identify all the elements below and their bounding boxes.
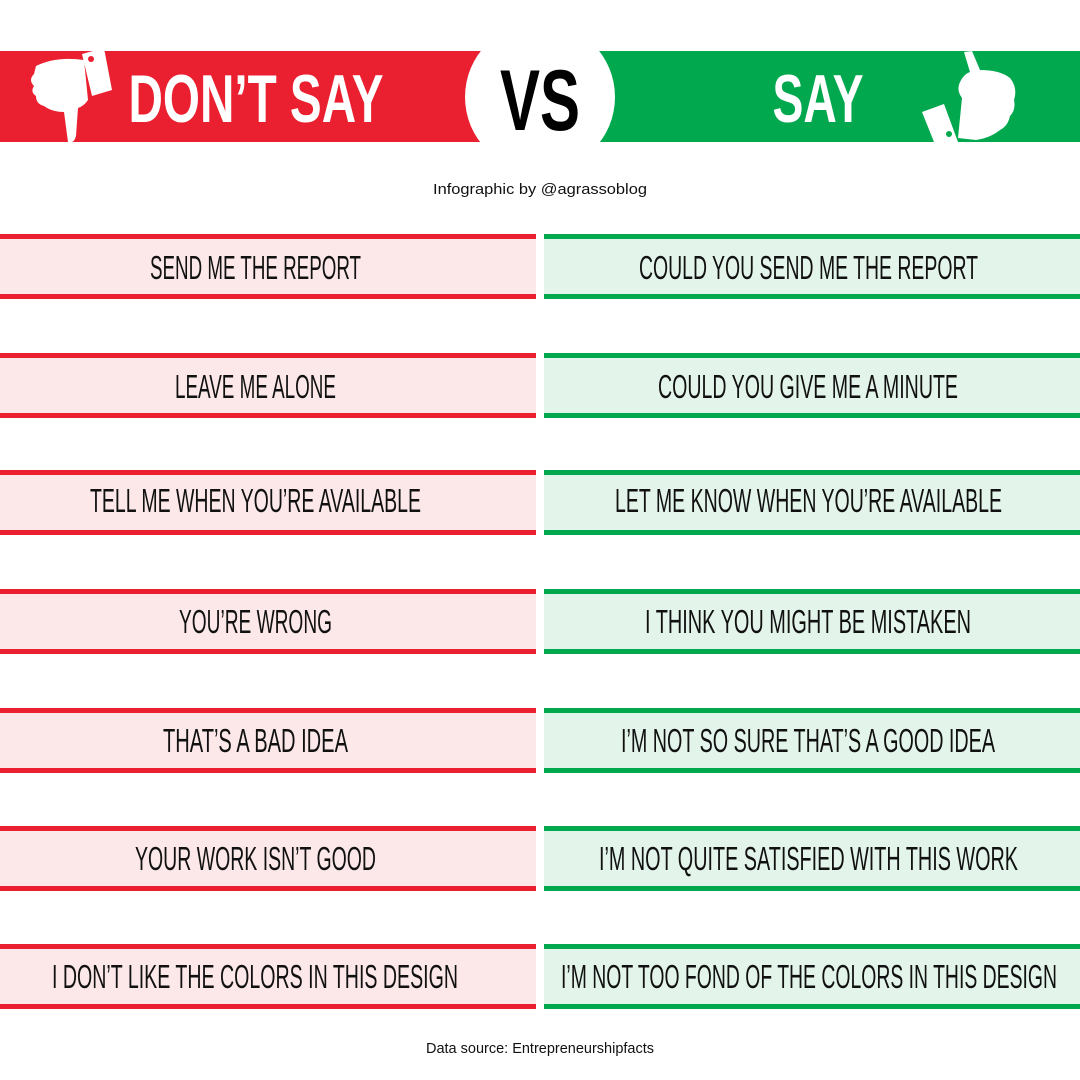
row 7 [0,944,1080,1009]
row 6: YOUR WORK ISN’T GOOD [135,840,376,877]
vs badge: VS [500,53,580,149]
row 4 [0,589,1080,654]
row 1: SEND ME THE REPORT [150,249,361,286]
row 2: LEAVE ME ALONE [175,368,336,405]
header: don't say band [0,48,540,142]
row 5 [0,708,1080,773]
footer source: Data source: Entrepreneurshipfacts [426,1040,654,1057]
row 3: TELL ME WHEN YOU’RE AVAILABLE [90,482,421,519]
credit: Infographic by @agrassoblog [433,181,647,198]
row 3 [0,470,1080,535]
row 6 [0,826,1080,891]
row 1 [0,234,1080,299]
heading: say: SAY [772,61,864,137]
row 2 [0,353,1080,418]
header: say band [540,51,1080,142]
icon: thumbs up [922,51,1015,142]
vs badge [465,22,615,172]
icon: thumbs down [31,48,112,142]
row 7: I DON’T LIKE THE COLORS IN THIS DESIGN [52,958,458,995]
heading: don't say: DON’T SAY [128,61,384,137]
row 5: THAT’S A BAD IDEA [163,722,348,759]
row 4: YOU’RE WRONG [179,603,332,640]
